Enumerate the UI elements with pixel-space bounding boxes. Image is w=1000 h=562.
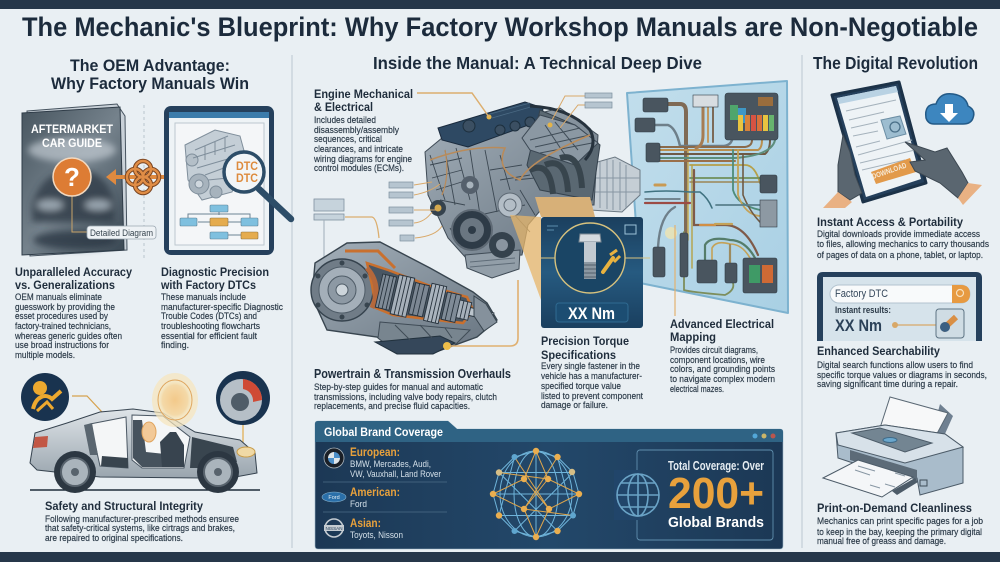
illustration: laptop search result (817, 272, 982, 341)
text: engine mechanical and electrical: sequences, critical (314, 134, 382, 145)
text: advanced electrical mapping: to navigate complex modern (670, 374, 775, 385)
text: unparalleled accuracy: whereas generic guides often (14, 331, 122, 342)
text: unparalleled accuracy: factory-trained technicians, (15, 321, 111, 332)
brand regions list (322, 447, 447, 541)
heading: OEM advantage: The OEM Advantage: (70, 56, 230, 75)
text: engine mechanical and electrical: wiring diagrams for engine (313, 154, 412, 165)
text: print-on-demand cleanliness (817, 501, 983, 547)
panel: inside the manual (311, 53, 788, 549)
heading: OEM advantage (51, 56, 249, 93)
text: engine mechanical and electrical: disassembly/assembly (314, 125, 399, 136)
illustration: diagnostic tablet: DTC (236, 173, 258, 185)
text: precision torque specifications: damage or failure. (541, 400, 608, 411)
illustration: cutaway transmission (311, 199, 518, 354)
illustration: tablet download with gloved hands (823, 82, 982, 208)
text: precision torque specifications: Precision Torque (541, 334, 629, 348)
chart: global network sphere (490, 448, 582, 540)
text: instant access and portability (817, 215, 989, 261)
text: unparalleled accuracy: Unparalleled Accuracy (15, 265, 132, 279)
illustration: aftermarket guide book: Detailed Diagram (90, 228, 153, 238)
text: powertrain and transmission overhauls: Step-by-step guides for manual and automatic (314, 382, 483, 393)
text: enhanced searchability: Digital search functions allow users to find (817, 360, 973, 371)
illustration: aftermarket guide book: CAR GUIDE (42, 136, 102, 150)
text: advanced electrical mapping: Mapping (670, 330, 716, 344)
text: precision torque specifications: Every single fastener in the (541, 361, 640, 372)
text: precision torque specifications (541, 334, 643, 411)
text: enhanced searchability: Enhanced Searchability (817, 344, 940, 358)
header bar (0, 0, 1000, 9)
text: powertrain and transmission overhauls: replacements, and precise fluid capacities. (314, 401, 470, 412)
text: diagnostic precision: finding. (161, 340, 189, 351)
panel: the OEM advantage (14, 56, 291, 544)
text: diagnostic precision: manufacturer-specific Diagnostic (161, 302, 283, 313)
text: diagnostic precision: essential for efficient fault (161, 331, 257, 342)
panel: global brand coverage (315, 421, 783, 549)
text: diagnostic precision (160, 265, 283, 351)
text: precision torque specifications: Specifications (541, 348, 616, 362)
illustration: laptop search result: XX Nm (835, 316, 882, 335)
icon: tangled arrows knot (106, 161, 183, 193)
text: instant access and portability: Digital downloads provide immediate access (817, 229, 980, 240)
illustration: engine with callouts (389, 93, 640, 278)
text: diagnostic precision: Trouble Codes (DTCs) and (161, 311, 257, 322)
illustration: tablet download with gloved hands: DOWNLOAD (871, 161, 908, 181)
brand regions list: NISSAN (325, 526, 343, 531)
footer bar (0, 552, 1000, 562)
text: precision torque specifications: specified torque value (541, 381, 621, 392)
text: safety and structural integrity: Safety and Structural Integrity (45, 499, 203, 513)
text: safety and structural integrity: are repaired to original specifications. (45, 533, 183, 544)
brand regions list: Asian: (350, 518, 381, 530)
text: powertrain and transmission overhauls: transmissions, including valve body repairs, clutch (314, 392, 497, 403)
text: unparalleled accuracy: use broad instructions for (15, 340, 109, 351)
illustration: aftermarket guide book (22, 104, 156, 256)
illustration: laptop search result: Factory DTC (835, 288, 888, 300)
text: powertrain and transmission overhauls: Powertrain & Transmission Overhauls (314, 367, 511, 381)
text: safety and structural integrity: Following manufacturer-prescribed methods ensuree (45, 514, 239, 525)
text: advanced electrical mapping: component locations, wire (670, 355, 765, 366)
total coverage box: Global Brands (668, 514, 764, 531)
brand regions list: VW, Vauxhall, Land Rover (350, 469, 441, 480)
text: engine mechanical and electrical: Includes detailed (314, 115, 376, 126)
text: diagnostic precision: with Factory DTCs (160, 278, 256, 292)
total coverage box: 200+ (668, 469, 764, 518)
text: diagnostic precision: troubleshooting flowcharts (161, 321, 260, 332)
text: advanced electrical mapping: Advanced Electrical (670, 317, 774, 331)
text: print-on-demand cleanliness: manual free of greass and damage. (817, 536, 946, 547)
text: print-on-demand cleanliness: Print-on-Demand Cleanliness (817, 501, 972, 515)
brand regions list: Toyots, Nisson (350, 530, 403, 541)
brand regions list: European: (350, 447, 400, 459)
text: safety and structural integrity (45, 499, 239, 544)
illustration: torque specification card: XX Nm (568, 304, 615, 323)
text: diagnostic precision: These manuals include (161, 292, 246, 303)
heading: technical deep dive: Inside the Manual: A Technical Deep Dive (373, 53, 702, 73)
text: unparalleled accuracy: guesswork by providing the (15, 302, 115, 313)
illustration: aftermarket guide book: AFTERMARKET (31, 122, 114, 136)
brand regions list: Ford (328, 495, 340, 501)
illustration: printer (823, 397, 963, 497)
panel: the digital revolution (813, 53, 989, 547)
heading: digital revolution: The Digital Revolution (813, 53, 978, 73)
illustration: diagnostic tablet: DTC (236, 161, 258, 173)
text: advanced electrical mapping: Provides circuit diagrams, (670, 345, 758, 356)
text: advanced electrical mapping: colors, and grounding points (670, 364, 775, 375)
text: engine mechanical and electrical: clearances, and intricate (314, 144, 403, 155)
brand regions list: Ford (350, 499, 367, 510)
text: diagnostic precision: Diagnostic Precision (161, 265, 269, 279)
text: unparalleled accuracy: OEM manuals eliminate (15, 292, 102, 303)
text: engine mechanical and electrical: Engine Mechanical (314, 87, 413, 101)
text: enhanced searchability (817, 344, 987, 390)
text: unparalleled accuracy (14, 265, 132, 361)
text: precision torque specifications: vehicle has a manufacturer- (541, 371, 642, 382)
text: enhanced searchability: saving significant time during a repair. (817, 379, 958, 390)
text: engine mechanical and electrical: control modules (ECMs). (314, 163, 404, 174)
text: instant access and portability: Instant Access & Portability (817, 215, 963, 229)
text: unparalleled accuracy: esset procedures used by (15, 311, 108, 322)
brand regions list: American: (350, 487, 400, 499)
text: engine mechanical and electrical: & Electrical (314, 100, 373, 114)
text: unparalleled accuracy: multiple models. (15, 350, 75, 361)
total coverage box (614, 450, 773, 540)
illustration: electrical wiring map panel (627, 81, 788, 313)
heading: global brand coverage: Global Brand Coverage (324, 425, 443, 439)
brand regions list: BMW, Mercades, Audi, (350, 459, 431, 470)
text: unparalleled accuracy: vs. Generalizations (15, 278, 115, 292)
text: powertrain and transmission overhauls (314, 367, 511, 412)
text: safety and structural integrity: that safety-critical systems, like cirtrags and brakes, (45, 523, 235, 534)
illustration: aftermarket guide book: ? (64, 162, 80, 192)
text: print-on-demand cleanliness: Mechanics can print specific pages for a job (817, 516, 983, 527)
illustration: diagnostic tablet (164, 106, 291, 255)
illustration: laptop search result: Instant results: (835, 305, 891, 315)
text: engine mechanical and electrical (313, 87, 413, 174)
text: advanced electrical mapping (670, 317, 775, 395)
text: precision torque specifications: listed to prevent component (541, 391, 643, 402)
total coverage box: Total Coverage: Over (668, 459, 764, 473)
heading: OEM advantage: Why Factory Manuals Win (51, 74, 249, 93)
text: advanced electrical mapping: electrical mazes. (670, 384, 724, 395)
illustration: torque specification card (510, 197, 675, 328)
illustration: car cutaway with airbag and brake (21, 371, 270, 493)
